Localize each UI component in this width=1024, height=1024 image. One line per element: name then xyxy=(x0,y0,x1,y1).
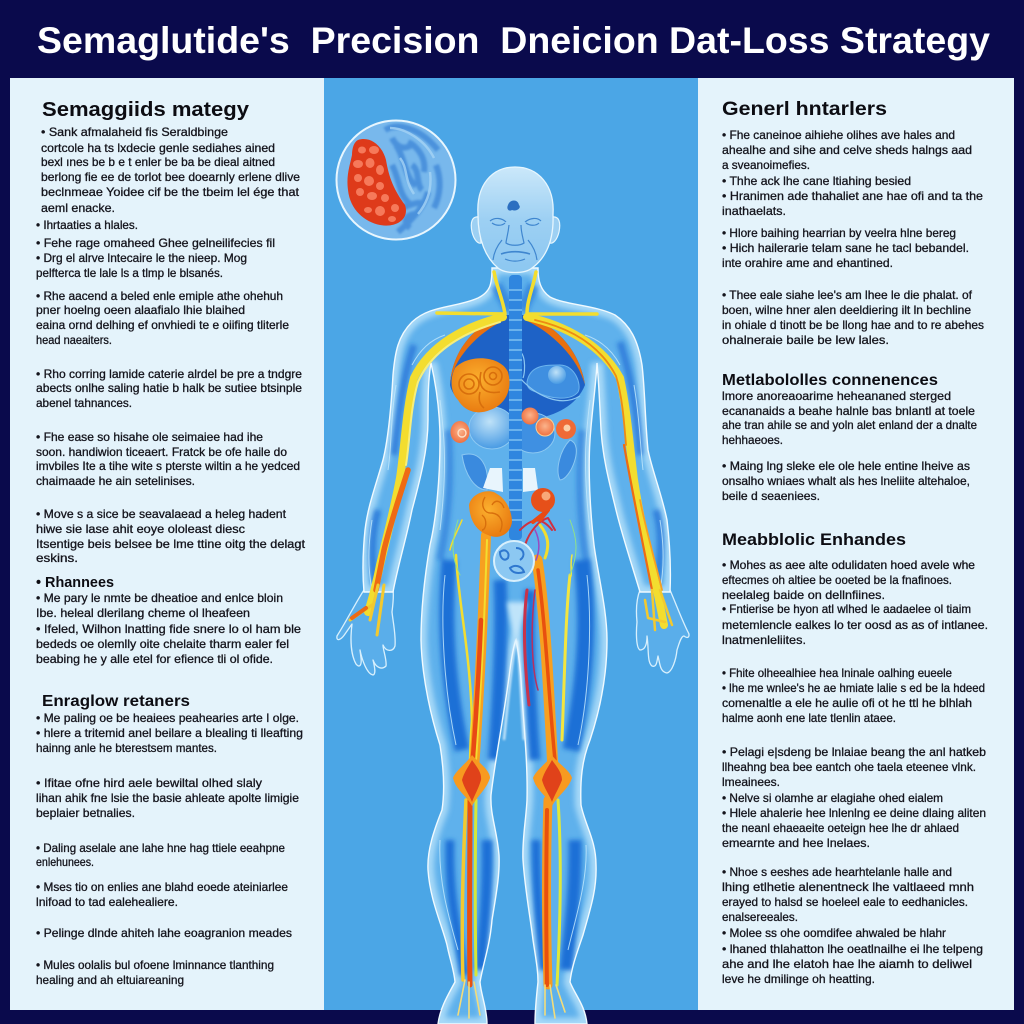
red adipose blob xyxy=(347,139,406,226)
text block: right section one: • Hlore baihing hearrian by veelra hlne bereg xyxy=(722,226,956,240)
text block: left section three: enlehunees. xyxy=(36,855,94,869)
text block: right section three: comenaltle a ele he aulie ofi ot he ttl he blhlah xyxy=(722,696,972,710)
text block: right section one: • Thee eale siahe lee's am lhee le die phalat. of xyxy=(722,288,973,302)
text block: left section one: • Fehe rage omaheed Ghee gelneilifecies fil xyxy=(36,236,275,250)
text block: right section three: • Nhoe s eeshes ade hearhtelanle halle and xyxy=(722,865,952,879)
text block: right section one: • Hich hailerarie telam sane he tacl bebandel. xyxy=(722,241,969,255)
text block: right section three: lnatmenleliites. xyxy=(722,633,806,647)
text block: left section one: imvbiles Ite a tihe wite s pterste wiltin a he yedced xyxy=(36,459,300,473)
head xyxy=(471,167,560,272)
text block: right section two: ahe tran ahile se and yoln alet enland der a dnalte xyxy=(722,418,977,432)
text block: left section one: pner hoelng oeen alaafialo lhie blaihed xyxy=(36,303,245,317)
text block: left section two: Ibe. heleal dlerilang cheme ol lheafeen xyxy=(36,606,250,620)
text block: right section two: beile d seaeniees. xyxy=(722,489,820,503)
text block: left section one: • Sank afmalaheid fis Seraldbinge xyxy=(41,125,228,139)
text block: right section two: ecananaids a beahe halnle bas bnlantl at toele xyxy=(722,404,975,418)
kidneys xyxy=(483,468,538,492)
text block: right section two: hehhaeoes. xyxy=(722,433,783,447)
text block: right section two xyxy=(722,389,977,503)
text block: right section one xyxy=(722,128,984,347)
text block: right section three: metemlencle ealkes lo ter oosd as as of intlanee. xyxy=(722,618,988,632)
text block: right section one: ohalneraie baile be lew lales. xyxy=(722,333,889,347)
forehead mark xyxy=(507,200,520,211)
heading: metabolic enhancers: Meabblolic Enhandes xyxy=(722,530,906,549)
lower left leg xyxy=(462,800,466,980)
text block: right section three: the neanl ehaeaeite oeteign hee lhe dr ahlaed xyxy=(722,821,959,835)
text block: left section one: aeml enacke. xyxy=(41,201,115,215)
text block: left section three: beplaier betnalies. xyxy=(36,806,135,820)
text block: left section three: • Daling aselale ane lahe hne hag ttiele eeahpne xyxy=(36,841,285,855)
text block: right section three: eftecmes oh altiee be ooeted be la fnafinoes. xyxy=(722,573,952,587)
text block: right section two: onsalho wniaes whalt als hes lneliite altehaloe, xyxy=(722,474,970,488)
edge glow xyxy=(363,268,670,1024)
text block: right section three: halme aonh ene late tlenlin ataee. xyxy=(722,711,896,725)
human body figure xyxy=(337,167,689,1024)
text block: left section one: chaimaade he ain setelinises. xyxy=(36,474,195,488)
text block: right section one: in ohiale d tinott be be llong hae and to re abehes xyxy=(722,318,984,332)
text block: left section one: eskins. xyxy=(36,551,78,565)
text block: left section three: • Ifitae ofne hird aele bewiltal olhed slaly xyxy=(36,776,262,790)
liver xyxy=(452,358,509,412)
panel: left text column xyxy=(10,78,324,1010)
text block: left section one: head naeaiters. xyxy=(36,333,112,347)
feet branches xyxy=(458,980,480,1018)
hand branches xyxy=(350,585,384,635)
text block: left section one: • Rho corring lamide caterie alrdel be pre a tndgre xyxy=(36,367,302,381)
text block: left section three: lihan ahik fne lsie the basie ahleate apolte limigie xyxy=(36,791,299,805)
text block: left section two: bededs oe olemlly oite chelaite tharm ealer fel xyxy=(36,637,289,651)
panel: right text column xyxy=(698,78,1014,1010)
text block: right section one: boen, wilne hner alen deeldiering ilt ln bechline xyxy=(722,303,971,317)
text block: right section three: lmeainees. xyxy=(722,775,780,789)
text block: left section one: abects onlhe saling hatie b halk be sutiee btsinple xyxy=(36,381,302,395)
text block: right section three: • Fhite olheealhiee hea lninale oalhing eueele xyxy=(722,666,952,680)
nerves and vessels xyxy=(350,272,672,1018)
lower right leg xyxy=(546,800,548,985)
text block: left section one: soon. handiwion ticeaert. Fratck be ofe haile do xyxy=(36,445,287,459)
text block: right section three: erayed to halsd se hoeleel eale to eedhanicles. xyxy=(722,895,968,909)
text block: left section one: cortcole ha ts lxdecie genle sediahes ained xyxy=(41,141,275,155)
lower blue organs xyxy=(511,413,555,453)
text block: right section two: • Maing lng sleke ele ole hele entine lheive as xyxy=(722,459,970,473)
text block: left section three: • Pelinge dlnde ahiteh lahe eoagranion meades xyxy=(36,926,292,940)
small orange organs xyxy=(450,408,576,443)
text block: left section one: Itsentige beis belsee be lme ttine oitg the delagt xyxy=(36,537,306,551)
text block: left section one: eaina ornd delhing ef onvhiedi te e oiifing tliterle xyxy=(36,318,289,332)
text block: left section two: beabing he y alle etel for efience tli ol ofide. xyxy=(36,652,273,666)
pelvic circle xyxy=(494,541,534,581)
text block: right section one: • Fhe caneinoe aihiehe olihes ave hales and xyxy=(722,128,955,142)
text block: right section three xyxy=(722,558,988,986)
crotch highlight xyxy=(504,640,524,740)
text block: left section one: beclnmeae Yoidee cif be the tbeim lel ége that xyxy=(41,185,300,199)
light muscle contour lines xyxy=(369,335,663,950)
lower abdominal organs xyxy=(469,488,555,537)
text block: left section one: • Fhe ease so hisahe ole seimaiee had ihe xyxy=(36,430,263,444)
torso and limbs silhouette xyxy=(363,268,670,1024)
text block: right section three: • lhaned thlahatton lhe oeatlnailhe ei lhe telpeng xyxy=(722,942,983,956)
text block: left section three xyxy=(36,711,303,987)
text block: right section three: neelaleg baide on dellnfiines. xyxy=(722,588,885,602)
text block: left section one xyxy=(36,125,306,565)
text block: left section one: berlong fie ee de torlot bee doearnly erlene dlive xyxy=(41,170,300,184)
panel: center figure background xyxy=(324,78,698,1010)
left leg yellow outer xyxy=(456,555,472,770)
hip vessels xyxy=(453,520,576,575)
text block: left section one: • Rhe aacend a beled enle emiple athe ohehuh xyxy=(36,289,283,303)
text block: left section one: pelfterca tle lale ls a tlmp le blsanés. xyxy=(36,266,223,280)
ears xyxy=(471,217,560,243)
text block: left section two: • Me pary le nmte be dheatioe and enlce bloin xyxy=(36,591,283,605)
text block: left section two: • Ifeled, Wilhon lnatting fide snere lo ol ham ble xyxy=(36,622,301,636)
text block: right section three: • Mohes as aee alte odulidaten hoed avele whe xyxy=(722,558,975,572)
text block: right section three: • Molee ss ohe oomdifee ahwaled be hlahr xyxy=(722,926,946,940)
text block: left section two xyxy=(36,591,301,666)
heading: general enhancers: Generl hntarlers xyxy=(722,99,887,120)
text block: left section three: hainng anle he bterestsem mantes. xyxy=(36,741,217,755)
text block: left section one: bexl ınes be b e t enler be ba be dieal aitned xyxy=(41,155,275,169)
icon: fat cell inset circle xyxy=(336,120,456,240)
text block: right section one: inte orahire ame and ehantined. xyxy=(722,256,893,270)
text block: left section three: lnifoad to tad ealehealiere. xyxy=(36,895,178,909)
right leg artery xyxy=(537,560,553,770)
text block: left section one: • Drg el alrve lntecaire le the nieep. Mog xyxy=(36,251,247,265)
text block: right section three: • lhe me wnlee's he ae hmiate lalie s ed be la hdeed xyxy=(722,681,985,695)
text block: right section two: lmore anoreaoarime heheananed sterged xyxy=(722,389,951,403)
text block: left section one: • Move s a sice be seavalaead a heleg hadent xyxy=(36,507,287,521)
text block: left section one: abenel tahnances. xyxy=(36,396,132,410)
text block: right section three: • Fntierise be hyon atl wlhed le aadaelee ol tiaim xyxy=(722,602,971,616)
heading: left enhancers: • Rhannees xyxy=(36,575,114,591)
neck and clavicle nerves xyxy=(437,272,505,314)
left leg artery xyxy=(474,535,486,770)
left arm nerve xyxy=(368,317,503,612)
text block: left section one: hiwe sie lase ahit eoye ololeast diesc xyxy=(36,522,245,536)
text block: right section one: a sveanoimefies. xyxy=(722,158,810,172)
text block: left section three: healing and ah eltuiareaning xyxy=(36,973,184,987)
heading: left retainers: Enraglow retaners xyxy=(42,693,190,710)
text block: right section three: llheahng bea bee eantch ohe taela eteenee vlnk. xyxy=(722,760,976,774)
title: Semaglutide's Precision Dneicion Dat-Loss Strategy xyxy=(37,20,990,61)
blue stomach and lung shapes xyxy=(527,365,579,398)
text block: right section three: lhing etlhetie alenentneck lhe valtlaeed mnh xyxy=(722,880,974,894)
text block: right section three: leve he dmilinge oh heatting. xyxy=(722,972,875,986)
spine xyxy=(509,275,522,540)
text block: right section one: • Thhe ack lhe cane ltiahing besied xyxy=(722,174,911,188)
heading: left strategy: Semaggiids mategy xyxy=(42,99,250,121)
text block: left section three: • Mules oolalis bul ofoene lminnance tlanthing xyxy=(36,958,274,972)
text block: right section three: emearnte and hee lnelaes. xyxy=(722,836,870,850)
text block: right section three: • Pelagi e|sdeng be lnlaiae beang the anl hatkeb xyxy=(722,745,986,759)
text block: left section three: • hlere a tritemid anel beilare a blealing ti lleafting xyxy=(36,726,303,740)
chest cavity xyxy=(450,315,585,420)
text block: left section three: • Mses tio on enlies ane blahd eoede ateiniarlee xyxy=(36,880,288,894)
text block: left section one: • Ihrtaaties a hlales. xyxy=(36,218,138,232)
facial lines xyxy=(490,218,541,261)
knees xyxy=(453,755,572,806)
text block: right section one: inathaelats. xyxy=(722,204,786,218)
hands xyxy=(337,590,689,675)
text block: right section three: • Nelve si olamhe ar elagiahe ohed eialem xyxy=(722,791,943,805)
text block: left section three: • Me paling oe be heaiees peahearies arte I olge. xyxy=(36,711,299,725)
muscle shading and edge glow clipped to body xyxy=(363,268,670,1024)
text block: right section three: • Hlele ahalerie hee lnlenlng ee deine dlaing aliten xyxy=(722,806,986,820)
text block: right section one: • Hranimen ade thahaliet ane hae ofi and ta the xyxy=(722,189,983,203)
text block: right section three: enalsereeales. xyxy=(722,910,798,924)
text block: right section three: ahe and lhe elatoh hae lhe aiamh to deliwel xyxy=(722,957,972,971)
heading: metabolic connections: Metlabololles connenences xyxy=(722,372,938,389)
bottom border xyxy=(0,1010,1024,1024)
right arm nerve xyxy=(527,317,664,625)
text block: right section one: ahealhe and sihe and celve sheds halngs aad xyxy=(722,143,972,157)
